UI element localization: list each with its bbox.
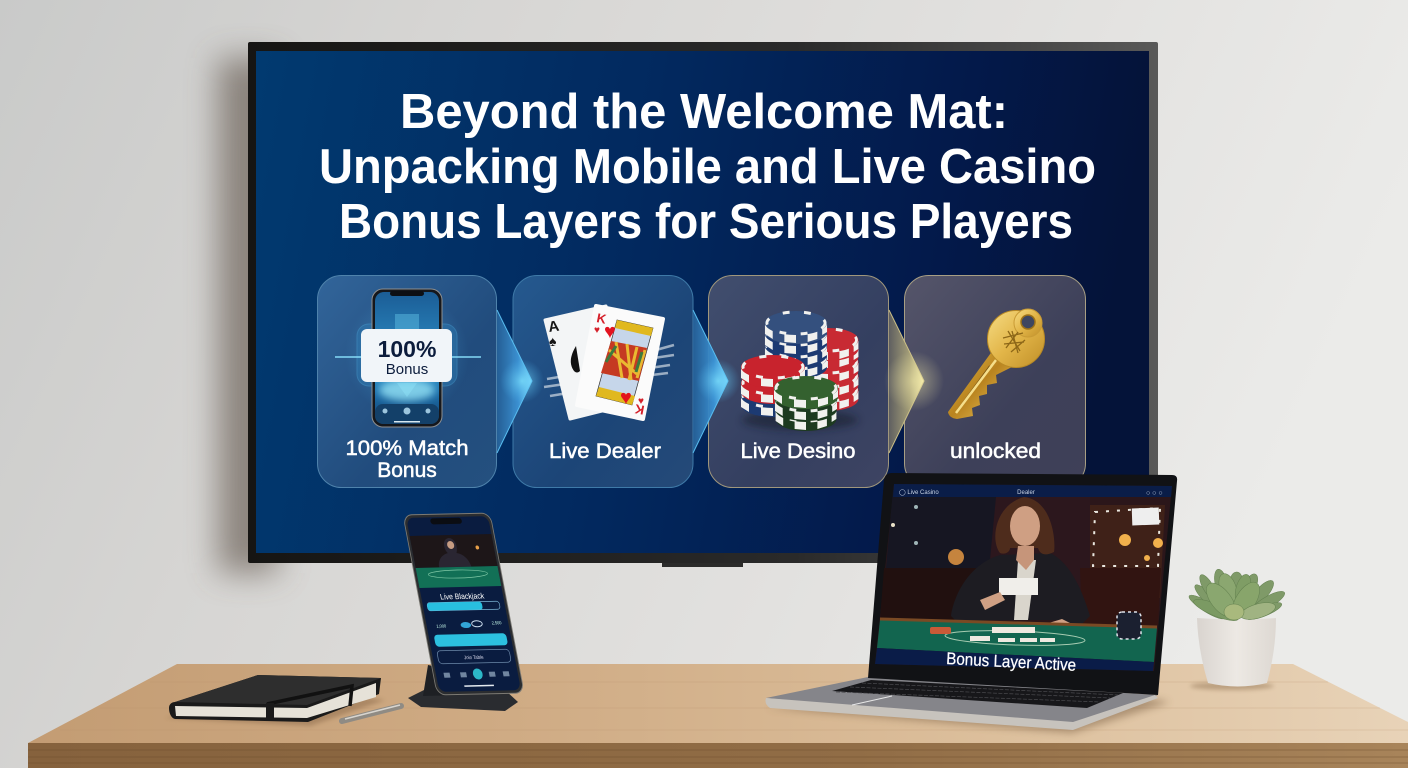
panel: unlocked [904,276,1086,488]
right red stack [798,328,858,411]
wooden desk [28,664,1408,768]
banner [875,648,1154,671]
icon: phone with bonus badge: Bonus [386,361,428,378]
arrow: step 3 to step 4 [884,310,944,453]
phone body and screen: Live Blackjack [439,591,485,602]
laptop screen [875,484,1172,671]
icon: playing cards: ♠ [549,333,557,349]
laptop screen: ◯ Live Casino [899,489,939,496]
casino table [877,620,1157,662]
laptop base [766,677,1158,727]
phone body and screen: Join Table [464,655,485,661]
laptop screen: Dealer [1017,490,1035,496]
phone body and screen [403,513,524,695]
notebook [165,675,385,726]
phone body and screen: 1,000 [436,623,447,629]
desk top [28,664,1408,743]
king card face art [596,320,653,405]
potted succulent [1187,568,1287,690]
laptop screen: ○ ○ ○ [1146,490,1163,497]
green stack [775,388,837,431]
icon: playing cards: ♥ [594,325,600,336]
laptop banner text: Bonus Layer Active [946,649,1077,675]
icon: playing cards: ♥ [620,387,632,409]
top navigation bar [893,484,1172,497]
icon: playing cards: ♥ [638,396,644,407]
icon: playing cards [544,306,674,419]
television frame [248,42,1158,563]
wall-mounted television [248,42,1158,567]
white pot [1197,618,1276,686]
television shadow on wall [218,58,278,573]
label: 100% match bonus: 100% Match [346,437,468,460]
panel: live desino [708,276,888,488]
title [319,85,1096,249]
icon: playing cards: K [633,401,646,418]
icon: playing cards: ♥ [604,321,616,343]
panel: 100% match bonus [318,276,496,488]
title: Unpacking Mobile and Live Casino [319,140,1096,194]
icon: playing cards: A [547,318,560,336]
phone stand [408,665,518,711]
television stand notch [662,563,743,567]
panel: live dealer [513,276,693,488]
keyboard [832,680,1123,708]
icon: golden key [948,309,1044,419]
pot shadow [1190,682,1274,690]
laptop [766,473,1177,733]
pen [342,705,401,721]
icon: phone with bonus badge: 100% [378,336,436,362]
label: unlocked: unlocked [950,440,1041,463]
small card display [1132,508,1159,525]
laptop lid [868,473,1177,695]
icon: playing cards: K [595,310,608,327]
title: Beyond the Welcome Mat: [400,85,1008,139]
television screen [256,51,1149,553]
blue stack [765,322,827,379]
succulent leaves [1187,568,1287,625]
phone body and screen: 2,500 [491,620,503,625]
title: Bonus Layers for Serious Players [339,195,1073,249]
desk front edge [28,743,1408,768]
studio lights [891,505,1163,565]
label: 100% match bonus: Bonus [377,459,437,482]
dealer [951,497,1090,631]
chip stack on table [1117,612,1141,639]
icon: casino chip stacks [741,311,858,431]
label: live desino: Live Desino [740,440,856,463]
laptop shadow [766,690,1170,733]
arrow: step 2 to step 3 [693,310,740,453]
phone on stand [403,513,524,711]
icon: phone with bonus badge [335,289,481,427]
label: live dealer: Live Dealer [549,440,661,463]
left stack [741,384,805,417]
arrow: step 1 to step 2 [497,310,544,453]
